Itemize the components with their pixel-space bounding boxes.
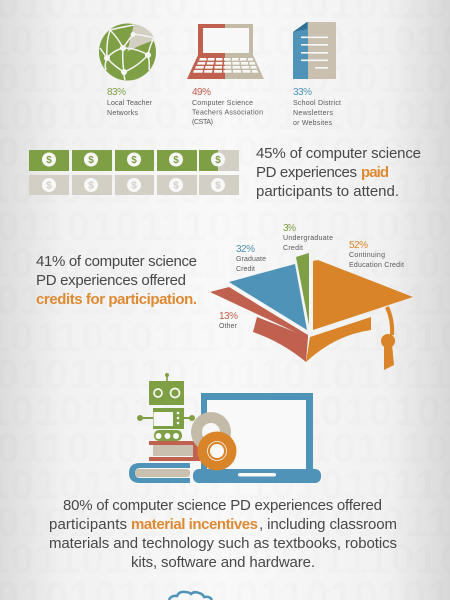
chart: dollar bills pictogram: $: [215, 180, 221, 192]
icon: document: [293, 22, 336, 79]
chart: dollar bills pictogram: $: [88, 155, 94, 166]
text: material incentives statement: [49, 497, 397, 571]
icon: robot: [137, 373, 195, 441]
panel: material incentives: [49, 373, 397, 571]
label: undergraduate credit: 3%: [283, 223, 296, 234]
icon: gray disc: [191, 412, 231, 452]
icon: globe network: [99, 24, 156, 80]
text: material incentives statement: 80% of computer science PD experiences offered: [63, 497, 382, 514]
label: undergraduate credit: [283, 223, 333, 252]
chart: dollar bills pictogram: $: [46, 155, 52, 166]
text: paid participants statement: paid: [361, 164, 389, 181]
stat: school district: Newsletters: [293, 110, 334, 117]
label: other credit: [219, 311, 238, 330]
text: material incentives statement: participants: [49, 516, 127, 533]
icon: laptop computer: [193, 393, 321, 483]
text: paid participants statement: participants to attend.: [256, 183, 399, 200]
label: undergraduate credit: Undergraduate: [283, 235, 333, 242]
stat: school district: or Websites: [293, 120, 332, 127]
label: graduate credit: Graduate: [236, 256, 266, 263]
label: continuing education credit: 52%: [349, 240, 368, 251]
text: credits statement: [36, 253, 197, 308]
text: paid participants statement: 45% of computer science: [256, 145, 421, 162]
chart: dollar bills pictogram: $: [173, 155, 179, 166]
label: continuing education credit: [349, 240, 404, 269]
chart: dollar bills pictogram: $: [46, 180, 52, 192]
panel: PD sources: [99, 22, 341, 127]
chart: dollar bills pictogram: [29, 150, 239, 195]
stat: school district: 33%: [293, 87, 312, 98]
text: material incentives statement: materials and technology such as textbooks, robotics: [49, 535, 397, 552]
label: graduate credit: [236, 244, 266, 273]
label: other credit: Other: [219, 323, 238, 330]
stat: school district: [293, 87, 341, 127]
stat: local teacher networks: [107, 87, 153, 117]
stat: CSTA: [192, 87, 263, 126]
label: undergraduate credit: Credit: [283, 245, 303, 252]
icon: stacked books: [129, 441, 204, 483]
chart: graduation cap pie: [210, 253, 413, 370]
label: other credit: 13%: [219, 311, 238, 322]
chart: dollar bills pictogram: $: [131, 180, 137, 192]
text: credits statement: 41% of computer science: [36, 253, 197, 270]
stat: school district: School District: [293, 100, 341, 107]
stat: local teacher networks: Networks: [107, 110, 138, 117]
chart: dollar bills pictogram: $: [173, 180, 179, 192]
label: continuing education credit: Continuing: [349, 252, 385, 259]
text: credits statement: credits for participation.: [36, 291, 197, 308]
icon: cloud: [169, 592, 212, 600]
chart: dollar bills pictogram: $: [88, 180, 94, 192]
chart: dollar bills pictogram: $: [215, 155, 221, 166]
text: paid participants statement: [256, 145, 421, 200]
icon: laptop: [187, 24, 264, 79]
panel: paid participants: [29, 145, 421, 200]
text: material incentives statement: , including classroom: [259, 516, 397, 533]
label: graduate credit: Credit: [236, 266, 255, 273]
stat: CSTA: Teachers Association: [192, 110, 263, 116]
text: paid participants statement: PD experiences: [256, 164, 357, 181]
text: material incentives statement: kits, software and hardware.: [131, 554, 315, 571]
stat: CSTA: (CSTA): [192, 119, 213, 126]
stat: local teacher networks: Local Teacher: [107, 100, 153, 107]
text: credits statement: PD experiences offered: [36, 272, 186, 289]
chart: dollar bills pictogram: $: [131, 155, 137, 166]
stat: CSTA: 49%: [192, 87, 211, 98]
stat: CSTA: Computer Science: [192, 100, 253, 107]
stat: local teacher networks: 83%: [107, 87, 126, 98]
label: graduate credit: 32%: [236, 244, 255, 255]
text: material incentives statement: material incentives: [131, 516, 258, 533]
label: continuing education credit: Education Credit: [349, 262, 404, 269]
panel: credits for participation: [36, 223, 413, 370]
icon: orange disc: [198, 432, 236, 470]
